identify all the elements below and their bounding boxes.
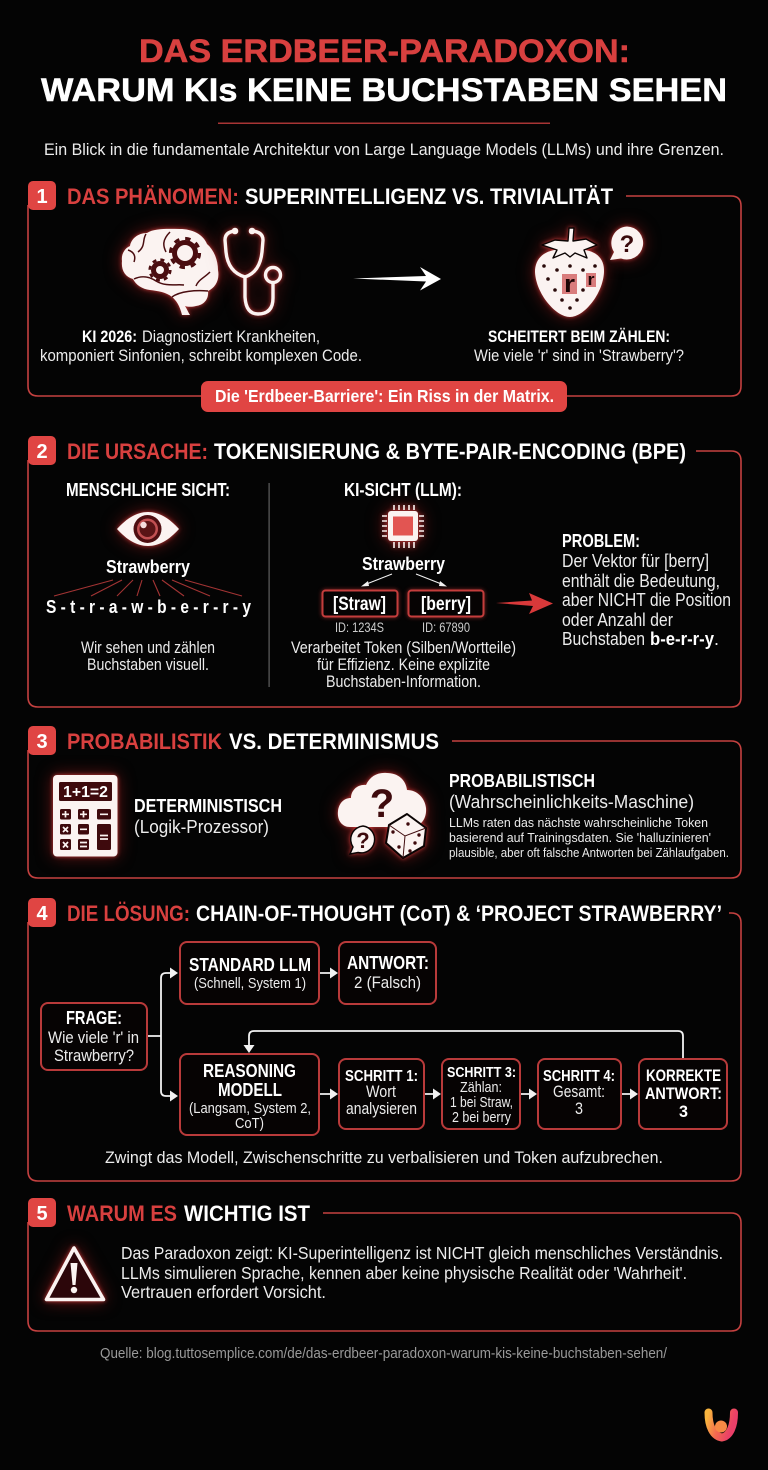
icon: brain with gears (122, 229, 218, 315)
text: AI description (291, 639, 516, 691)
node: step 1: SCHRITT 1: (345, 1068, 418, 1085)
text: probabilistic: LLMs raten das nächste wahrscheinliche Token (449, 815, 708, 830)
node: reasoning model: (Langsam, System 2, (189, 1100, 311, 1117)
section 1 heading: DAS PHÄNOMEN: (67, 184, 239, 209)
icon: strawberry: r (588, 270, 595, 289)
node: question: Strawberry? (54, 1047, 134, 1065)
text: AI description: Buchstaben-Information. (326, 673, 481, 691)
text: deterministic (134, 796, 282, 837)
text: deterministic: DETERMINISTISCH (134, 796, 282, 816)
section 5 badge (28, 1198, 56, 1227)
node: reasoning model (180, 1054, 319, 1135)
node: step 1 (339, 1059, 424, 1129)
section 5 heading (67, 1201, 310, 1226)
section 2 heading: DIE URSACHE: (67, 439, 208, 464)
text: human description (81, 639, 215, 674)
heading: AI view: KI-SICHT (LLM): (344, 480, 462, 500)
text: probabilistic: basierend auf Trainingsdaten. Sie 'halluzinieren' (449, 830, 711, 845)
node: reasoning model: REASONING (203, 1060, 296, 1081)
icon: warning triangle (46, 1248, 104, 1300)
token ids: ID: 67890 (422, 620, 470, 635)
node: step 3: Zählan: (460, 1080, 502, 1096)
token: Straw: [Straw] (333, 593, 386, 615)
section 3 badge: 3 (36, 731, 48, 753)
flow arrows (147, 968, 683, 1102)
node: standard LLM: (Schnell, System 1) (194, 975, 306, 992)
text: spelled letters: S - t - r - a - w - b - e - r - r - y (46, 597, 251, 617)
icon: calculator: 1+1=2 (63, 784, 108, 801)
node: step 3: SCHRITT 3: (447, 1065, 516, 1081)
node: step 3 (442, 1059, 520, 1129)
node: correct answer (639, 1059, 727, 1129)
text: Strawberry human: Strawberry (106, 556, 191, 577)
text: problem: PROBLEM: (562, 531, 640, 551)
node: wrong answer: 2 (Falsch) (354, 974, 421, 992)
node: wrong answer (339, 942, 436, 1004)
text: counting failure: Wie viele 'r' sind in 'Strawberry'? (474, 347, 684, 365)
text: Strawberry AI: Strawberry (362, 553, 446, 574)
title: DAS ERDBEER-PARADOXON: (139, 33, 630, 69)
node: step 1: Wort (366, 1083, 396, 1101)
text: counting failure (474, 328, 684, 365)
node: correct answer: ANTWORT: (645, 1085, 722, 1103)
icon: question bubble (610, 226, 643, 260)
fan lines to letters (54, 580, 242, 596)
section 2 heading: TOKENISIERUNG & BYTE-PAIR-ENCODING (BPE) (214, 439, 686, 464)
text: problem: aber NICHT die Position (562, 590, 731, 610)
node: step 4: 3 (575, 1100, 583, 1118)
text: human description: Wir sehen und zählen (81, 639, 215, 657)
split arrows (361, 574, 447, 586)
section 1 heading (67, 184, 613, 209)
text: problem: . (714, 629, 719, 649)
text: human description: Buchstaben visuell. (87, 656, 209, 674)
section 1 badge (28, 181, 56, 210)
token ids: ID: 1234S (335, 620, 384, 635)
section 1 heading: SUPERINTELLIGENZ VS. TRIVIALITÄT (245, 184, 613, 209)
text: probabilistic: PROBABILISTISCH (449, 771, 595, 791)
text: probabilistic: (Wahrscheinlichkeits-Maschine) (449, 791, 694, 812)
section 3 badge (28, 726, 56, 755)
text: problem: enthält die Bedeutung, (562, 571, 720, 591)
panel: section 4 solution (28, 898, 741, 1181)
node: question: FRAGE: (66, 1007, 122, 1028)
node: reasoning model: CoT) (235, 1115, 264, 1132)
panel: section 3 probabilistic vs deterministic (28, 726, 741, 878)
section 1 badge: 1 (36, 186, 48, 208)
section 5 heading: WICHTIG IST (184, 1201, 310, 1226)
node: question: Wie viele 'r' in (48, 1029, 139, 1047)
section 4 heading: DIE LÖSUNG: (67, 901, 190, 926)
node: step 4: Gesamt: (553, 1083, 605, 1101)
icon: cloud with dice (338, 773, 426, 858)
text: problem: Der Vektor für [berry] (562, 551, 709, 571)
source line: Quelle: blog.tuttosemplice.com/de/das-erdbeer-paradoxon-warum-kis-keine-buchstaben-sehen/ (100, 1345, 668, 1362)
section 2 heading (67, 439, 686, 464)
text: importance: Das Paradoxon zeigt: KI-Superintelligenz ist NICHT gleich menschliches Verständnis. (121, 1243, 723, 1263)
text: importance: Vertrauen erfordert Vorsicht. (121, 1282, 326, 1302)
node: wrong answer: ANTWORT: (347, 952, 429, 973)
section 4 badge (28, 898, 56, 927)
arrow: red to problem (496, 593, 553, 614)
icon: question bubble: ? (620, 231, 634, 258)
text: AI description: für Effizienz. Keine explizite (317, 656, 490, 674)
section 5 badge: 5 (36, 1203, 48, 1225)
subtitle: Ein Blick in die fundamentale Architektur von Large Language Models (LLMs) und ihre Grenzen. (44, 141, 724, 159)
logo (708, 1412, 734, 1438)
node: step 3: 2 bei berry (452, 1110, 512, 1126)
section 2 badge: 2 (36, 441, 48, 463)
text: AI capabilities: Diagnostiziert Krankheiten, (142, 328, 320, 346)
title: WARUM KIs KEINE BUCHSTABEN SEHEN (41, 72, 727, 108)
node: step 1: analysieren (346, 1100, 417, 1118)
node: correct answer: 3 (679, 1103, 688, 1121)
icon: cloud with dice: ? (370, 782, 394, 826)
panel: section 2 cause (28, 436, 741, 707)
text: solution summary: Zwingt das Modell, Zwischenschritte zu verbalisieren und Token aufzubrechen. (105, 1148, 663, 1167)
section 2 badge (28, 436, 56, 465)
heading: human view: MENSCHLICHE SICHT: (66, 480, 230, 500)
text: importance (121, 1243, 723, 1302)
node: step 4: SCHRITT 4: (543, 1068, 615, 1085)
text: AI capabilities: KI 2026: (82, 328, 137, 346)
text: AI description: Verarbeitet Token (Silben/Wortteile) (291, 639, 516, 657)
icon: strawberry: r (564, 271, 575, 298)
section 3 heading: VS. DETERMINISMUS (229, 729, 439, 754)
token ids (335, 620, 470, 635)
text: importance: LLMs simulieren Sprache, kennen aber keine physische Realität oder 'Wahrheit'. (121, 1263, 687, 1283)
node: question (41, 1003, 147, 1070)
node: step 4 (538, 1059, 621, 1129)
section 4 badge: 4 (36, 903, 48, 925)
node: standard LLM (180, 942, 319, 1004)
icon: eye (117, 512, 179, 546)
panel: section 5 why it matters (28, 1198, 741, 1331)
token: berry (408, 590, 484, 616)
icon: strawberry (535, 228, 604, 317)
text: probabilistic (449, 771, 729, 860)
icon: chip (382, 505, 424, 548)
title (41, 33, 727, 108)
text: probabilistic: plausible, aber oft falsche Antworten bei Zählaufgaben. (449, 845, 729, 860)
node: reasoning model: MODELL (218, 1079, 282, 1100)
text: problem: b-e-r-r-y (650, 629, 714, 649)
text: problem (562, 531, 731, 649)
text: problem: oder Anzahl der (562, 610, 673, 630)
icon: cloud with dice: ? (356, 828, 370, 853)
node: step 3: 1 bei Straw, (450, 1095, 513, 1111)
text: counting failure: SCHEITERT BEIM ZÄHLEN: (488, 328, 670, 346)
node: standard LLM: STANDARD LLM (189, 954, 311, 975)
token: berry: [berry] (421, 593, 471, 615)
callout: strawberry barrier: Die 'Erdbeer-Barriere': Ein Riss in der Matrix. (215, 386, 554, 406)
text: deterministic: (Logik-Prozessor) (134, 816, 269, 837)
icon: calculator (53, 775, 118, 856)
node: correct answer: KORREKTE (646, 1067, 721, 1085)
callout: strawberry barrier (201, 381, 567, 412)
text: AI capabilities: komponiert Sinfonien, schreibt komplexen Code. (40, 347, 362, 365)
panel: section 1 phenomenon (28, 181, 741, 412)
icon: stethoscope (225, 229, 280, 314)
text: AI capabilities (40, 328, 362, 365)
text: problem: Buchstaben (562, 629, 645, 649)
section 5 heading: WARUM ES (67, 1201, 177, 1226)
arrow: phenomenon to failure (353, 267, 441, 290)
section 3 heading (67, 729, 439, 754)
section 3 heading: PROBABILISTIK (67, 729, 223, 754)
